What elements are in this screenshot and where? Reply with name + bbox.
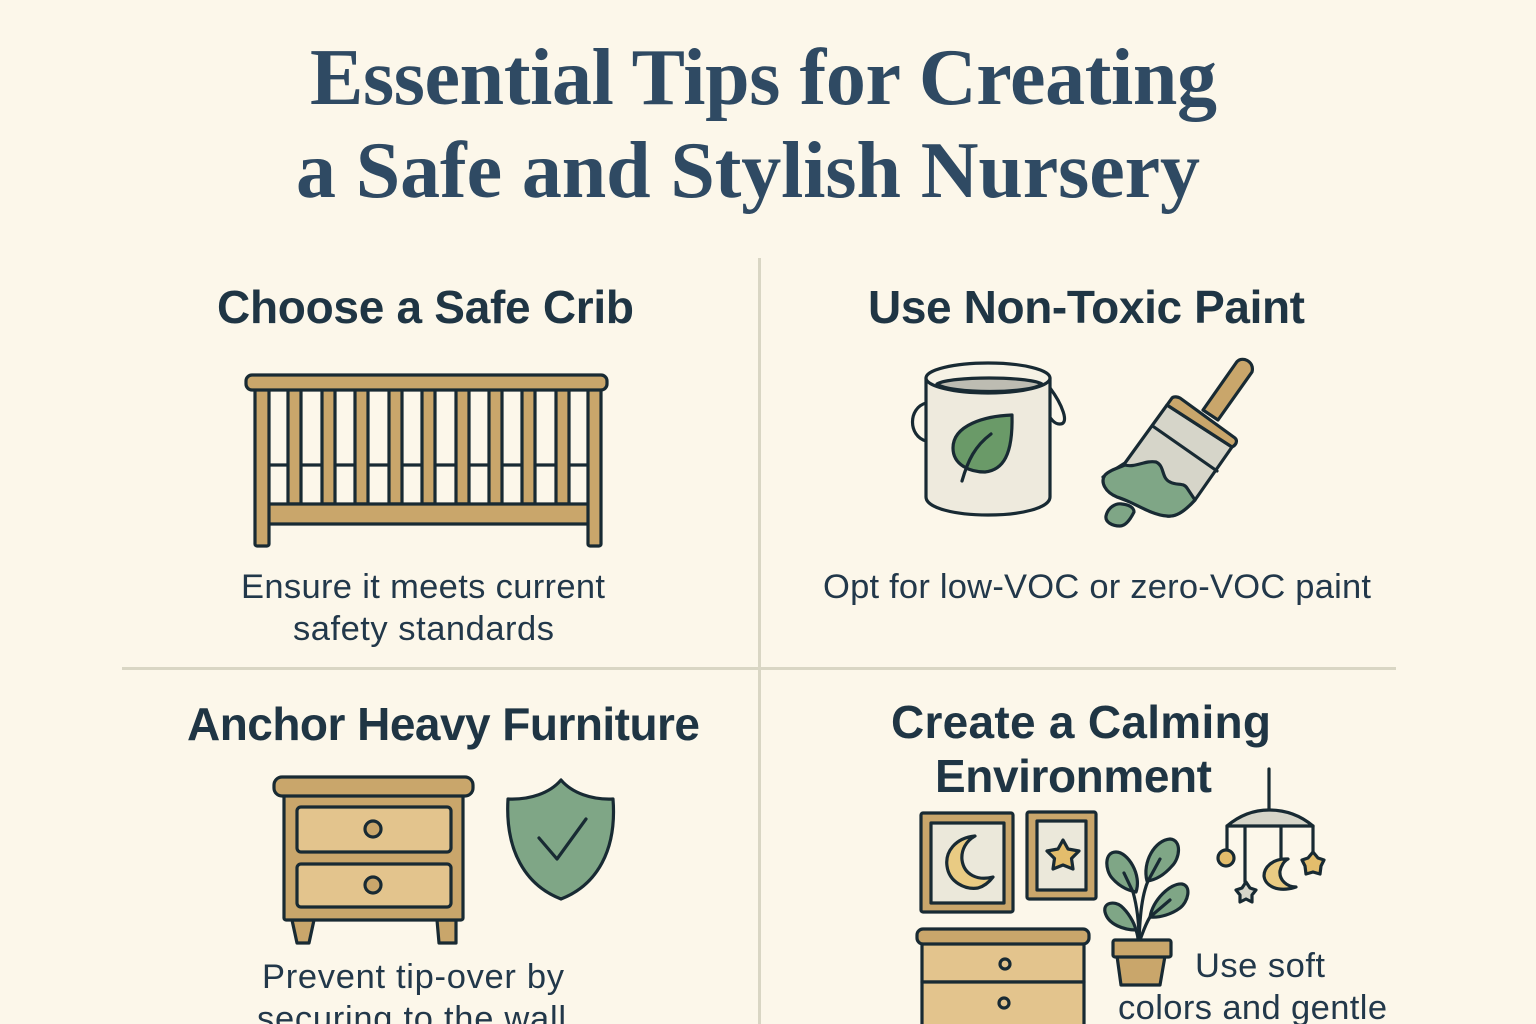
text: crib description: Ensure it meets current (241, 568, 605, 606)
panel: choose a safe crib (217, 281, 634, 648)
text: paint description: Opt for low-VOC or zero-VOC paint (823, 568, 1371, 606)
heading: anchor heavy furniture: Anchor Heavy Furniture (187, 698, 700, 750)
text: furniture description (257, 958, 566, 1024)
text: furniture description: Prevent tip-over by (262, 958, 565, 996)
icon: moon picture frame (921, 813, 1013, 912)
panel: use non-toxic paint (823, 281, 1371, 606)
panel: create a calming environment (891, 696, 1387, 1024)
icon: paint brush with green paint (1103, 359, 1252, 526)
heading: create a calming environment (891, 696, 1271, 802)
icon: shield with check (508, 780, 614, 899)
panel: anchor heavy furniture (187, 698, 700, 1024)
heading: create a calming environment: Create a Calming (891, 696, 1271, 748)
text: calming description: Use soft (1195, 947, 1325, 985)
icon: paint can with leaf (912, 363, 1065, 515)
title: a Safe and Stylish Nursery (296, 127, 1200, 215)
icon: baby mobile (1218, 769, 1324, 902)
heading: use non-toxic paint: Use Non-Toxic Paint (868, 281, 1305, 333)
text: crib description (241, 568, 605, 648)
title (296, 34, 1217, 215)
text: crib description: safety standards (293, 610, 554, 648)
heading: choose a safe crib: Choose a Safe Crib (217, 281, 634, 333)
heading: create a calming environment: Environment (935, 750, 1212, 802)
icon: star picture frame (1027, 812, 1096, 899)
text: calming description (1118, 947, 1387, 1024)
icon: crib (246, 375, 607, 546)
icon: nightstand (274, 777, 473, 943)
icon: dresser (917, 929, 1089, 1024)
icon: potted plant (1105, 839, 1188, 985)
title: Essential Tips for Creating (310, 34, 1217, 122)
